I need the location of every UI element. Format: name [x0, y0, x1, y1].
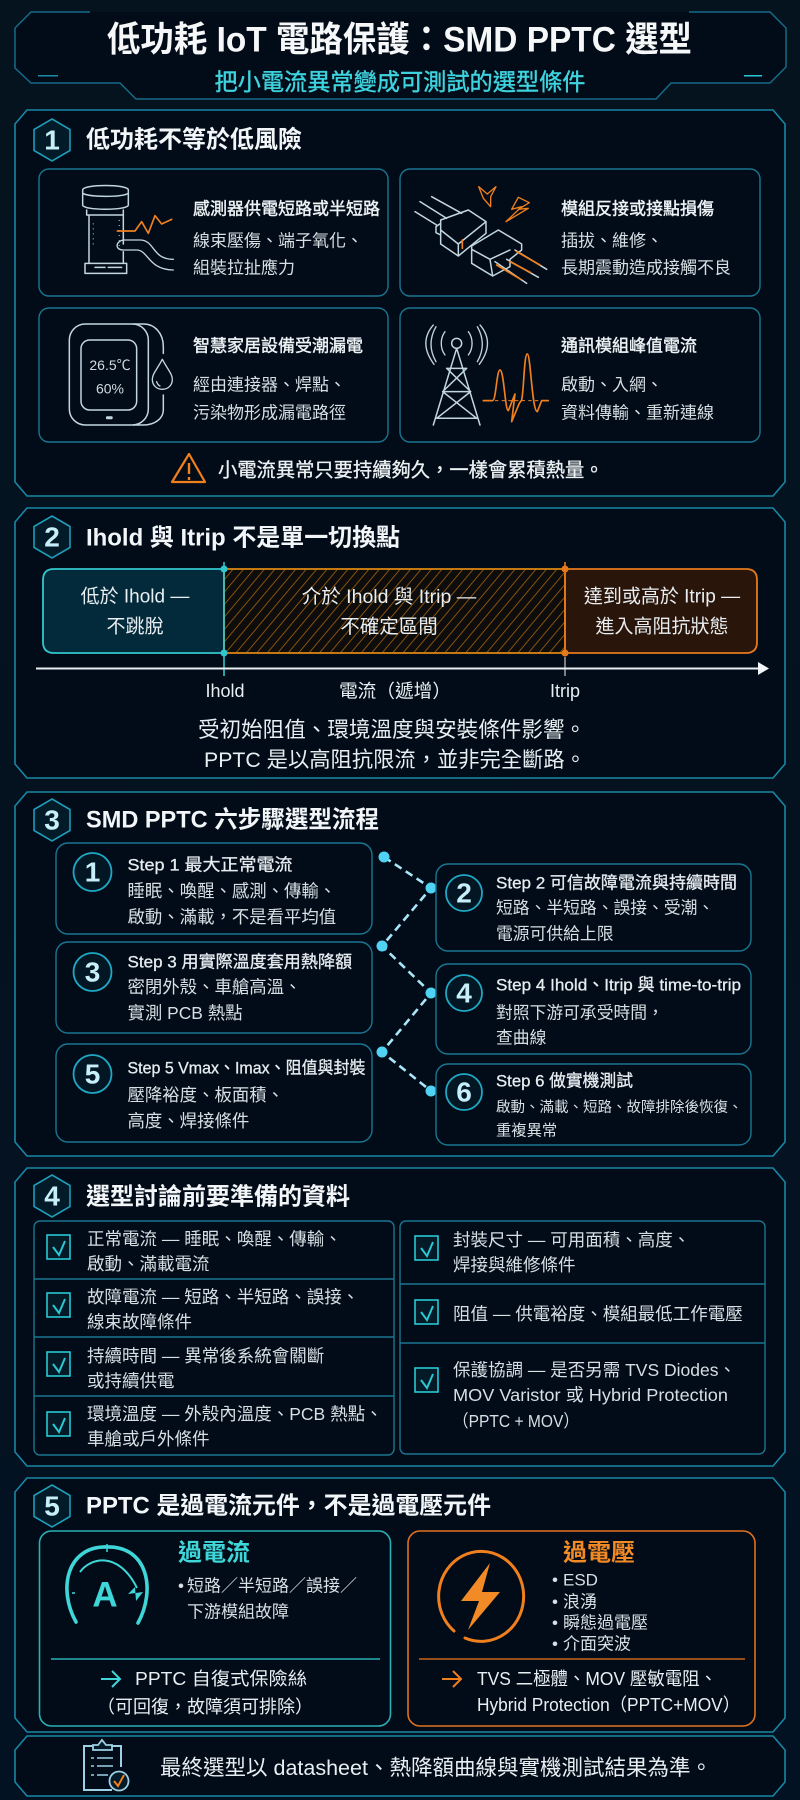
overvoltage bullets: 浪湧 — [563, 1592, 597, 1612]
overvoltage bullets: 瞬態過電壓 — [563, 1614, 648, 1632]
step 4: 查曲線 — [496, 1028, 547, 1048]
axis labels: Ihold — [205, 681, 245, 701]
text: 經由連接器、焊點、 — [193, 376, 346, 394]
axis labels: 電流（遞增） — [339, 680, 451, 702]
step 4 — [436, 964, 751, 1054]
badge 1: 1 — [44, 124, 60, 156]
text: 組裝拉扯應力 — [193, 258, 295, 278]
text: 污染物形成漏電路徑 — [193, 404, 346, 422]
item: protection coordination: 保護協調 — 是否另需 TVS Diodes、 — [453, 1360, 736, 1380]
step 5 — [56, 1044, 372, 1142]
step connector — [376, 852, 436, 1096]
text: 感測器供電短路或半短路 — [193, 198, 380, 218]
overcurrent bullets: • — [178, 1576, 184, 1596]
step 2: 2 — [456, 878, 472, 908]
item: duration: 持續時間 — 異常後系統會關斷 — [87, 1346, 324, 1366]
badge 5: 5 — [44, 1490, 60, 1522]
step 5: Step 5 Vmax、Imax、阻值與封裝 — [128, 1058, 366, 1078]
item: protection coordination: MOV Varistor 或 Hybrid Protection — [453, 1385, 728, 1405]
arrow — [442, 1671, 461, 1687]
heading 3: SMD PPTC 六步驟選型流程 — [86, 806, 379, 834]
overvoltage bullets: • — [552, 1592, 558, 1612]
step 6: Step 6 做實機測試 — [496, 1072, 633, 1090]
text — [193, 198, 380, 278]
title: 低功耗 IoT 電路保護：SMD PPTC 選型 — [107, 20, 692, 60]
step 2: 電源可供給上限 — [496, 924, 614, 944]
overvoltage conclusion — [477, 1669, 740, 1715]
step 1: 1 — [85, 856, 100, 888]
card: overcurrent — [40, 1531, 390, 1726]
panel: low power is not low risk — [15, 110, 785, 496]
step 3: 密閉外殼、車艙高溫、 — [128, 977, 301, 997]
zone: below Ihold: 低於 Ihold — — [81, 586, 189, 608]
item: duration — [47, 1346, 324, 1391]
icon: thermostat with droplet — [69, 324, 172, 425]
icon: thermostat with droplet: 26.5℃ — [89, 357, 131, 373]
item: ambient temperature: 環境溫度 — 外殼內溫度、PCB 熱點、 — [87, 1404, 383, 1424]
item: fault current: 故障電流 — 短路、半短路、誤接、 — [87, 1287, 359, 1307]
panel: six step flow — [15, 792, 785, 1156]
subtitle: 把小電流異常變成可測試的選型條件 — [214, 69, 586, 95]
item: fault current — [47, 1287, 359, 1332]
icon: warning triangle — [172, 454, 205, 482]
step 1: Step 1 最大正常電流 — [128, 856, 292, 874]
card: reverse connection — [400, 169, 760, 296]
step 3: 實測 PCB 熱點 — [128, 1003, 242, 1023]
badge 5 — [34, 1485, 70, 1527]
checklist left — [34, 1221, 394, 1455]
axis arrow — [36, 662, 769, 675]
heading 1: 低功耗不等於低風險 — [86, 126, 302, 154]
overvoltage bullets: • — [552, 1570, 558, 1590]
text: 模組反接或接點損傷 — [561, 200, 714, 218]
icon: connectors — [415, 187, 547, 283]
overcurrent bullets — [178, 1576, 357, 1622]
overvoltage title: 過電壓 — [563, 1540, 635, 1566]
icon: clipboard with check — [84, 1740, 128, 1790]
panel: data checklist — [15, 1168, 785, 1466]
overcurrent conclusion: PPTC 自復式保險絲 — [135, 1669, 307, 1689]
item: package size: 焊接與維修條件 — [453, 1255, 576, 1275]
step 3: 3 — [85, 956, 100, 988]
overcurrent title: 過電流 — [178, 1540, 250, 1566]
item: resistance: 阻值 — 供電裕度、模組最低工作電壓 — [453, 1304, 743, 1324]
item: package size — [415, 1230, 690, 1275]
overvoltage conclusion: Hybrid Protection（PPTC+MOV） — [477, 1695, 740, 1715]
heading 4: 選型討論前要準備的資料 — [86, 1184, 350, 1210]
icon: ammeter gauge: A — [92, 1576, 118, 1614]
heading 5: PPTC 是過電流元件，不是過電壓元件 — [86, 1492, 491, 1520]
step 1: 睡眠、喚醒、感測、傳輸、 — [128, 881, 336, 901]
step 4: 4 — [456, 978, 472, 1008]
step 6: 啟動、滿載、短路、故障排除後恢復、 — [496, 1098, 742, 1116]
overcurrent conclusion: （可回復，故障須可排除） — [97, 1697, 313, 1717]
zone: below Ihold: 不跳脫 — [106, 616, 164, 638]
icon: sensor — [83, 185, 173, 273]
item: duration: 或持續供電 — [87, 1371, 174, 1391]
item: normal current: 正常電流 — 睡眠、喚醒、傳輸、 — [87, 1229, 342, 1249]
panel: overcurrent vs overvoltage — [15, 1478, 785, 1732]
step 4: Step 4 Ihold、Itrip 與 time-to-trip — [496, 976, 741, 994]
warning text: 小電流異常只要持續夠久，一樣會累積熱量。 — [218, 460, 604, 482]
footer banner — [15, 1736, 785, 1796]
item: ambient temperature — [47, 1404, 383, 1449]
text: 啟動、入網、 — [561, 376, 663, 394]
step 6: 6 — [456, 1076, 472, 1108]
heading 2: Ihold 與 Itrip 不是單一切換點 — [86, 524, 400, 552]
badge 3: 3 — [44, 804, 60, 836]
step 5: 高度、焊接條件 — [128, 1111, 249, 1131]
step 2 — [436, 864, 751, 951]
text — [193, 336, 363, 422]
step 5: 5 — [85, 1058, 100, 1090]
icon: thermostat with droplet: 60% — [96, 380, 124, 396]
item: package size: 封裝尺寸 — 可用面積、高度、 — [453, 1230, 690, 1250]
text: 插拔、維修、 — [561, 232, 663, 250]
text: 智慧家居設備受潮漏電 — [193, 336, 363, 356]
overvoltage bullets — [552, 1570, 648, 1654]
title banner — [15, 12, 786, 99]
overcurrent bullets: 下游模組故障 — [187, 1602, 289, 1622]
step 1 — [56, 843, 372, 934]
icon: ammeter gauge — [67, 1544, 147, 1623]
overcurrent bullets: 短路／半短路／誤接／ — [187, 1576, 357, 1596]
card: overvoltage — [408, 1531, 755, 1726]
panel: Ihold and Itrip — [15, 508, 785, 778]
icon: tower with current spikes — [426, 325, 548, 425]
zone: trip — [565, 569, 757, 653]
text: 線束壓傷、端子氧化、 — [193, 232, 363, 250]
note: 受初始阻值、環境溫度與安裝條件影響。 — [198, 718, 586, 742]
card: comms peak current — [400, 308, 760, 442]
zone: uncertain — [224, 569, 565, 653]
checklist right — [400, 1221, 765, 1454]
badge 3 — [34, 799, 70, 841]
card: smart home leakage — [39, 308, 388, 442]
item: normal current — [47, 1229, 342, 1274]
overvoltage conclusion: TVS 二極體、MOV 壓敏電阻、 — [477, 1669, 717, 1689]
item: fault current: 線束故障條件 — [87, 1312, 192, 1332]
item: normal current: 啟動、滿載電流 — [87, 1254, 210, 1274]
axis labels: Itrip — [550, 681, 580, 701]
item: ambient temperature: 車艙或戶外條件 — [87, 1429, 210, 1449]
item: protection coordination — [415, 1360, 736, 1431]
text: 通訊模組峰值電流 — [561, 336, 697, 356]
overvoltage bullets: 介面突波 — [563, 1634, 631, 1654]
overvoltage bullets: • — [552, 1614, 558, 1632]
badge 2 — [34, 516, 70, 558]
zone: uncertain: 介於 Ihold 與 Itrip — — [302, 586, 477, 608]
item: protection coordination: （PPTC + MOV） — [453, 1411, 579, 1431]
badge 2: 2 — [44, 522, 60, 552]
step 2: 短路、半短路、誤接、受潮、 — [496, 898, 714, 918]
zone bar — [43, 562, 757, 676]
badge 4: 4 — [44, 1180, 60, 1212]
text — [561, 200, 731, 278]
icon: lightning bolt — [439, 1551, 524, 1641]
zone: below Ihold — [43, 569, 224, 653]
card: sensor short circuit — [39, 169, 388, 296]
note — [198, 718, 586, 772]
overvoltage bullets: • — [552, 1634, 558, 1654]
step 6: 重複異常 — [496, 1122, 557, 1140]
text — [561, 336, 714, 422]
note: PPTC 是以高阻抗限流，並非完全斷路。 — [204, 748, 586, 772]
overvoltage bullets: ESD — [563, 1570, 598, 1590]
step 1: 啟動、滿載，不是看平均值 — [128, 907, 336, 927]
axis labels — [205, 680, 580, 702]
zone: trip: 達到或高於 Itrip — — [584, 586, 740, 608]
step 3: Step 3 用實際溫度套用熱降額 — [128, 952, 352, 972]
step 5: 壓降裕度、板面積、 — [128, 1085, 284, 1105]
step 6 — [436, 1064, 751, 1145]
step 3 — [56, 942, 372, 1033]
text: 資料傳輸、重新連線 — [561, 404, 714, 422]
badge 1 — [34, 119, 70, 161]
step 2: Step 2 可信故障電流與持續時間 — [496, 874, 737, 892]
zone: trip: 進入高阻抗狀態 — [595, 616, 729, 638]
badge 4 — [34, 1175, 70, 1217]
overcurrent conclusion — [97, 1669, 313, 1717]
text: 長期震動造成接觸不良 — [561, 258, 731, 278]
step 4: 對照下游可承受時間， — [496, 1004, 664, 1022]
arrow — [101, 1671, 120, 1687]
footer text: 最終選型以 datasheet、熱降額曲線與實機測試結果為準。 — [160, 1756, 712, 1780]
zone: uncertain: 不確定區間 — [340, 616, 438, 638]
